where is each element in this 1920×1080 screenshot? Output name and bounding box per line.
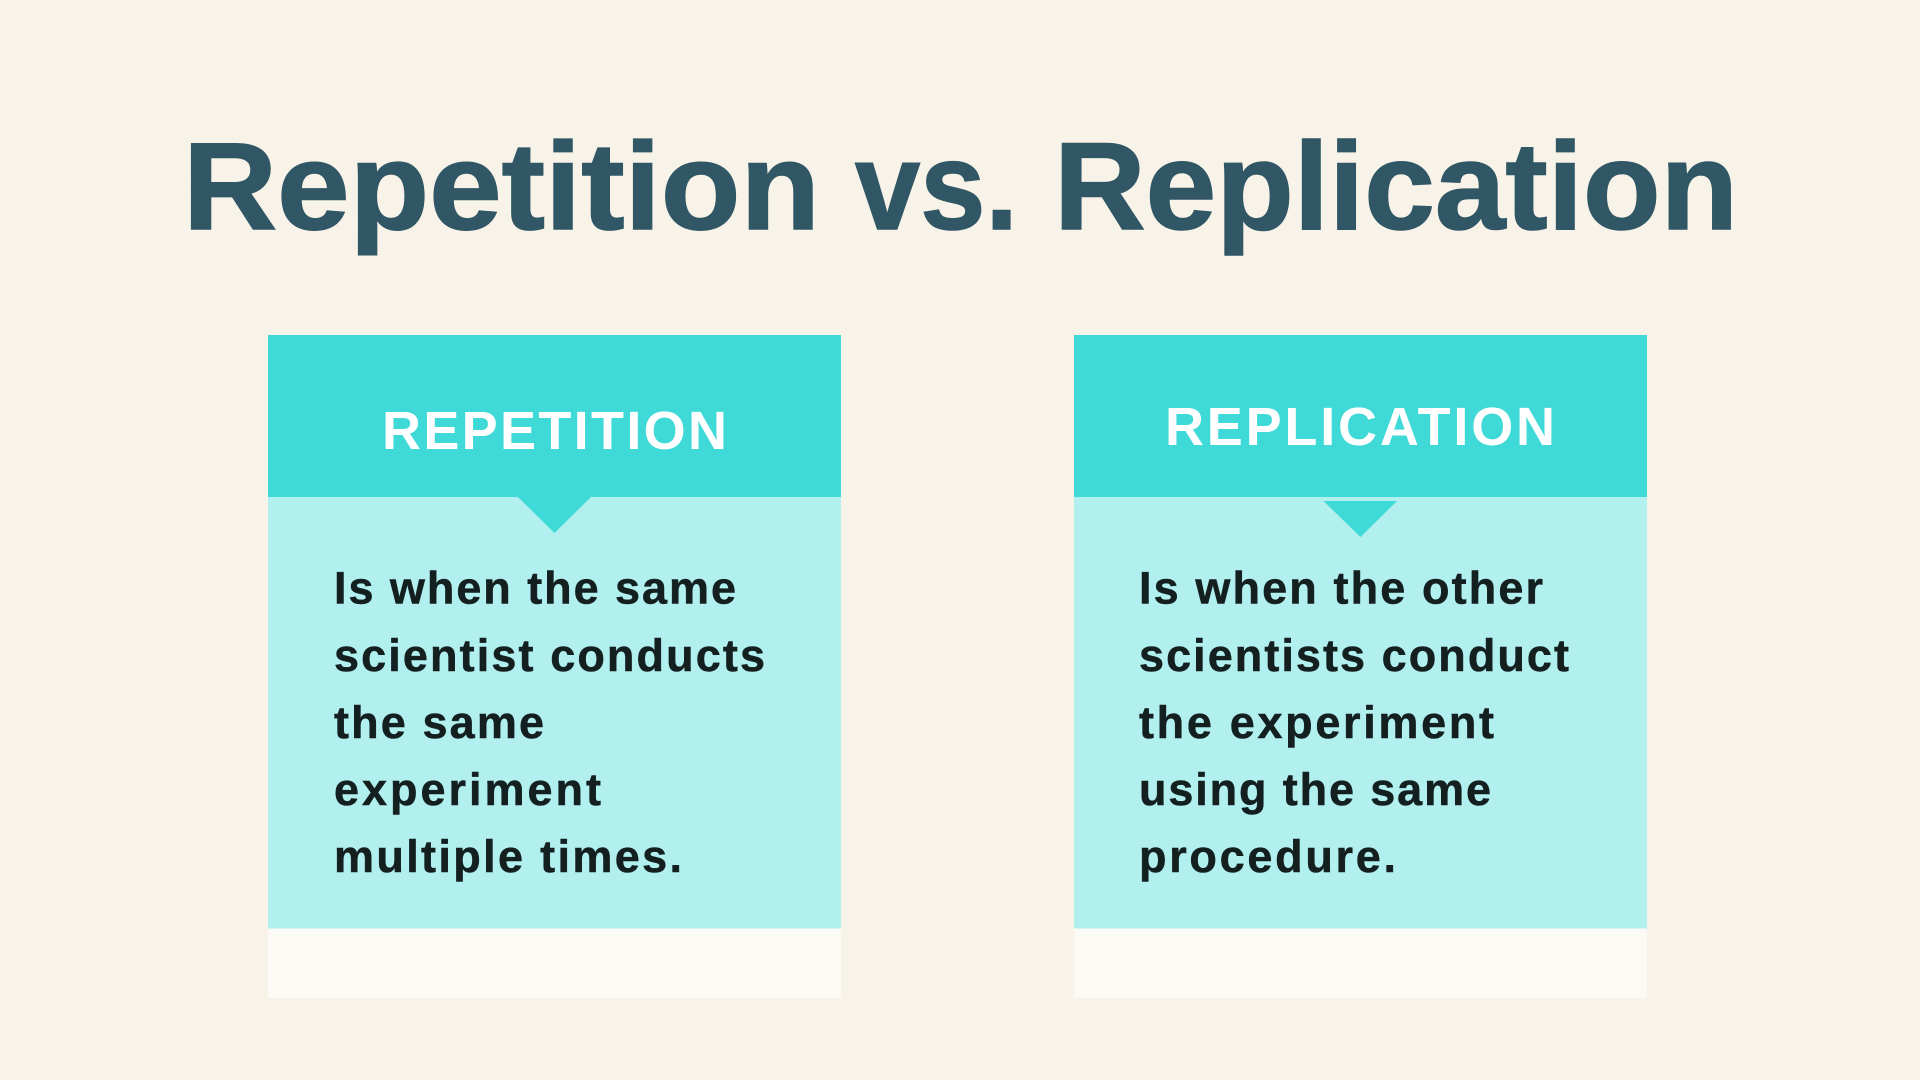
title — [183, 118, 1738, 256]
text block: repetition definition: Is when the same — [334, 562, 736, 614]
text block: repetition definition: experiment — [334, 764, 601, 815]
pointer: repetition — [518, 497, 591, 533]
text block: replication definition — [1139, 562, 1569, 882]
panel: repetition — [268, 335, 841, 998]
header band: repetition — [268, 335, 841, 497]
text block: replication definition: Is when the other — [1139, 562, 1543, 614]
body background: repetition — [268, 497, 841, 928]
text block: replication definition: using the same — [1139, 764, 1491, 815]
header band: replication — [1074, 335, 1647, 497]
text block: replication definition: scientists conduct — [1139, 630, 1569, 681]
body background: replication — [1074, 497, 1647, 928]
text block: repetition definition — [334, 562, 765, 882]
footer strip: repetition — [268, 928, 841, 998]
text block: replication definition: procedure. — [1139, 831, 1396, 882]
text block: repetition definition: the same — [334, 697, 544, 748]
title: vs. — [855, 118, 1018, 256]
title: Repetition — [183, 118, 820, 256]
heading: replication: REPLICATION — [1165, 397, 1555, 457]
title: Replication — [1054, 118, 1738, 256]
text block: repetition definition: multiple times. — [334, 831, 682, 882]
heading: repetition: REPETITION — [382, 401, 727, 461]
panel: replication — [1074, 335, 1647, 998]
text block: repetition definition: scientist conducts — [334, 630, 765, 681]
text block: replication definition: the experiment — [1139, 697, 1494, 748]
pointer: replication — [1324, 501, 1397, 537]
footer strip: replication — [1074, 928, 1647, 998]
